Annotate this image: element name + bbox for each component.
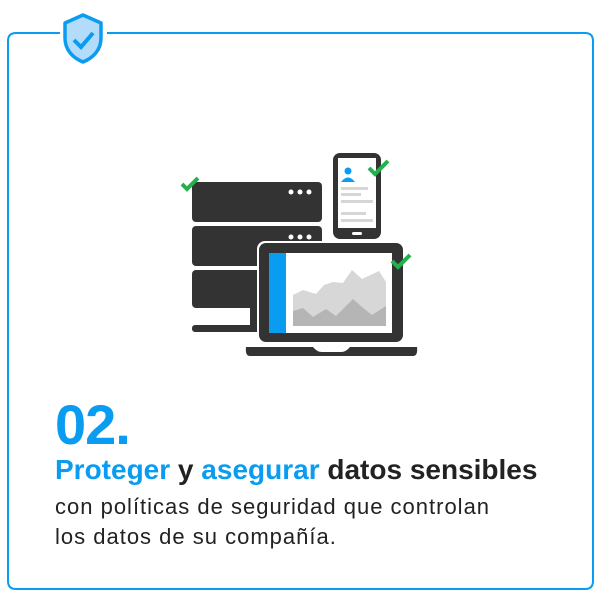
body text: los datos de su compañía. bbox=[55, 524, 337, 549]
number: 02. bbox=[55, 393, 130, 456]
checks bbox=[182, 161, 410, 267]
icon: shield check bbox=[63, 13, 103, 64]
body text bbox=[55, 494, 490, 549]
server bbox=[192, 182, 322, 332]
laptop bbox=[243, 241, 421, 358]
body text: con políticas de seguridad que controlan bbox=[55, 494, 490, 519]
heading: Proteger y asegurar datos sensibles bbox=[55, 454, 537, 485]
phone bbox=[333, 153, 381, 239]
